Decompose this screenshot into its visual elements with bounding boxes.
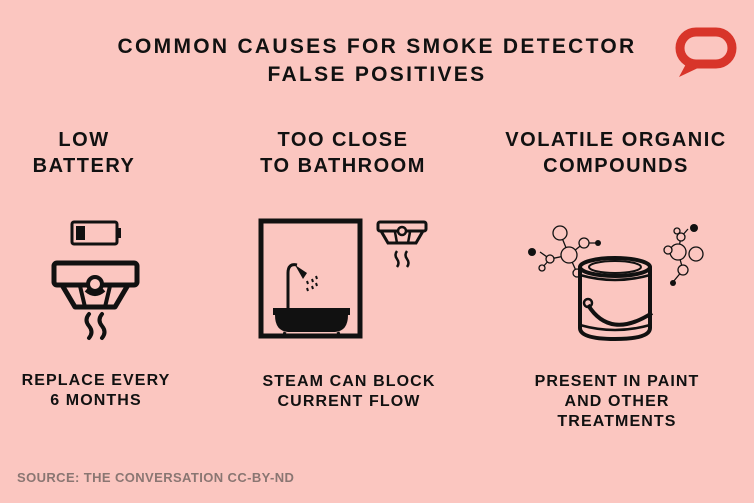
heading: voc	[505, 129, 727, 177]
heading: bathroom	[260, 129, 426, 177]
caption: bathroom: CURRENT FLOW	[278, 393, 420, 410]
icon: paint can with molecules	[528, 224, 704, 341]
heading: low battery: BATTERY	[33, 155, 135, 177]
logo	[676, 28, 736, 77]
caption: voc: TREATMENTS	[557, 413, 677, 430]
heading: low battery	[33, 129, 135, 177]
title: COMMON CAUSES FOR SMOKE DETECTOR	[118, 35, 636, 58]
caption: low battery: 6 MONTHS	[50, 392, 142, 409]
heading: bathroom: TOO CLOSE	[278, 129, 408, 151]
heading: low battery: LOW	[58, 129, 110, 151]
icon: battery and detector	[52, 220, 140, 340]
caption: bathroom	[263, 373, 435, 410]
caption: voc	[535, 373, 699, 430]
caption: low battery: REPLACE EVERY	[22, 372, 170, 389]
title: FALSE POSITIVES	[268, 63, 486, 86]
caption: low battery	[22, 372, 170, 409]
heading: bathroom: TO BATHROOM	[260, 155, 426, 177]
source: SOURCE: THE CONVERSATION CC-BY-ND	[17, 470, 294, 485]
title	[118, 35, 636, 86]
icon: bathroom	[258, 218, 428, 338]
heading: voc: VOLATILE ORGANIC	[505, 129, 727, 151]
caption: voc: PRESENT IN PAINT	[535, 373, 699, 390]
caption: voc: AND OTHER	[564, 393, 670, 410]
heading: voc: COMPOUNDS	[543, 155, 689, 177]
caption: bathroom: STEAM CAN BLOCK	[263, 373, 435, 390]
